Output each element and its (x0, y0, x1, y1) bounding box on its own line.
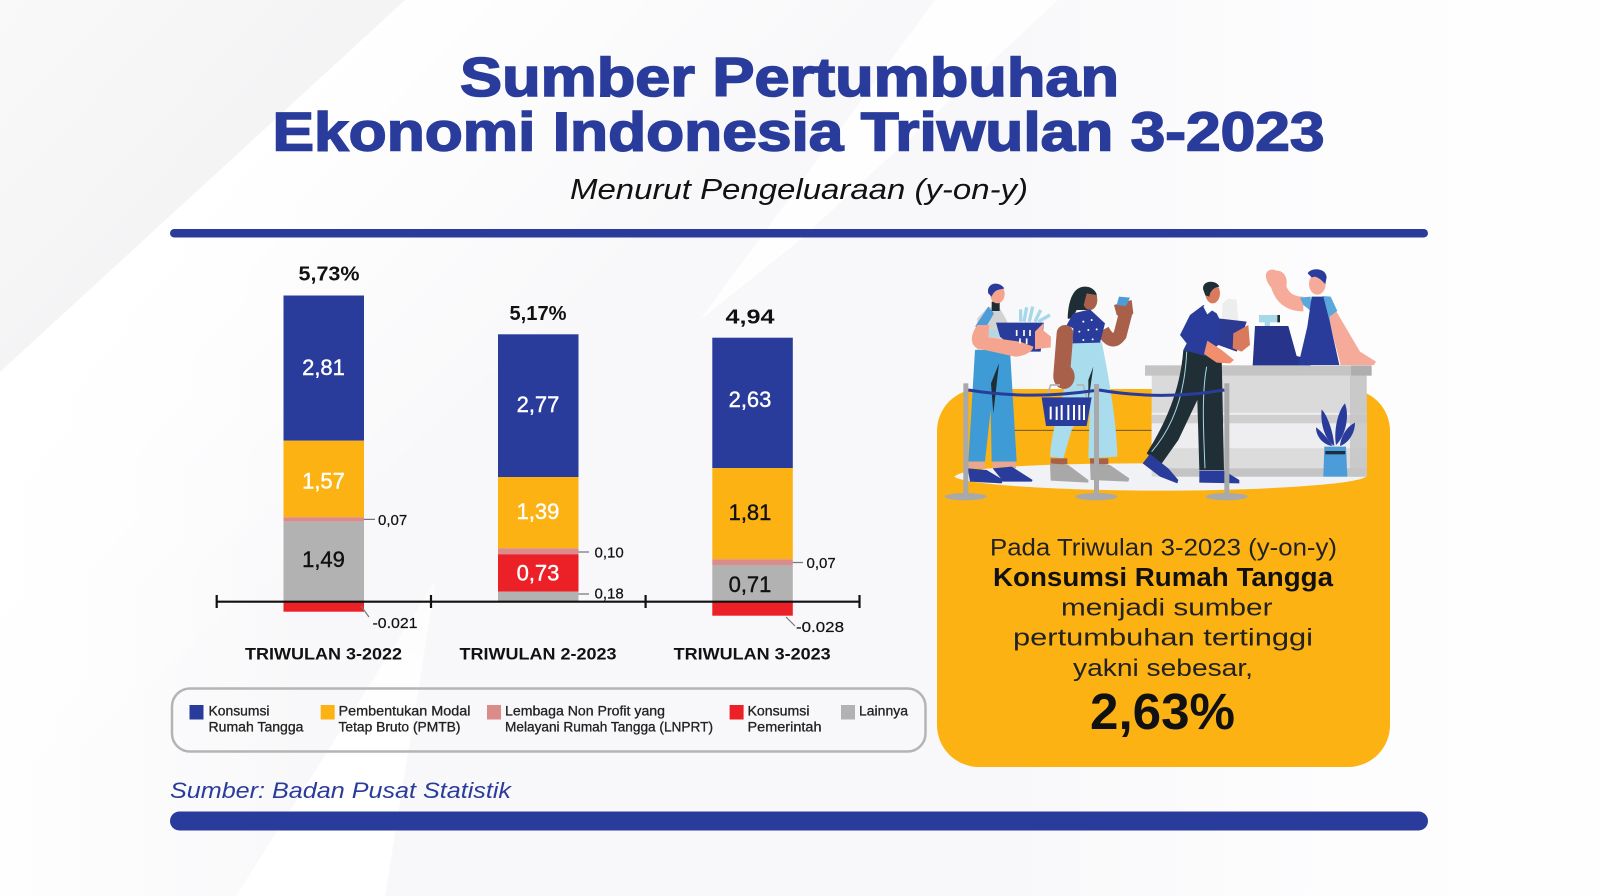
legend item: Konsumsi Rumah Tangga: Rumah Tangga (208, 720, 304, 734)
bar: Triwulan 2-2023: 1,39 (517, 499, 559, 524)
cashier (1266, 269, 1376, 365)
bar: Triwulan 3-2023: 0,71 (729, 572, 771, 597)
legend item: PMTB (321, 704, 470, 734)
title: Sumber Pertumbuhan (460, 46, 1119, 108)
bar: Triwulan 3-2023: 0,07 (806, 555, 836, 572)
legend item: Konsumsi Rumah Tangga (190, 704, 304, 734)
bar: Triwulan 3-2022: 5,73% (298, 264, 360, 286)
legend item: Konsumsi Pemerintah (730, 704, 822, 734)
bar: Triwulan 3-2023: -0.028 (796, 619, 844, 636)
bar: Triwulan 3-2022: 2,81 (302, 355, 345, 380)
rope barrier (945, 383, 1248, 500)
quarter labels: TRIWULAN 3-2023 (674, 644, 831, 664)
bar: Triwulan 3-2023: 4,94 (726, 306, 776, 328)
bar: Triwulan 2-2023: 2,77 (517, 392, 559, 417)
legend item: Lainnya: Lainnya (859, 704, 909, 718)
top rule (170, 229, 1428, 238)
finding text: menjadi sumber (1061, 594, 1272, 622)
legend item: Konsumsi Pemerintah: Pemerintah (748, 720, 822, 734)
legend item: LNPRT (487, 704, 713, 734)
bar: Triwulan 3-2022: 0,07 (378, 512, 407, 529)
quarter labels: TRIWULAN 2-2023 (460, 644, 616, 664)
quarter labels (245, 644, 831, 664)
bar: Triwulan 2-2023 (498, 303, 624, 602)
woman with phone (1050, 287, 1133, 483)
title: Ekonomi Indonesia Triwulan 3-2023 (272, 100, 1324, 162)
quarter labels: TRIWULAN 3-2022 (245, 644, 402, 664)
bar: Triwulan 3-2022: 1,57 (302, 468, 345, 494)
legend item: PMTB: Tetap Bruto (PMTB) (338, 720, 460, 734)
illustration: shoppers queueing at a cashier (945, 269, 1376, 500)
legend item: LNPRT: Lembaga Non Profit yang (505, 704, 665, 718)
bar: Triwulan 2-2023: 5,17% (510, 303, 567, 325)
bar: Triwulan 3-2022 (284, 264, 418, 632)
legend item: PMTB: Pembentukan Modal (338, 704, 470, 718)
man with basket (968, 284, 1051, 483)
bar: Triwulan 3-2022: 1,49 (302, 547, 345, 572)
finding text: Pada Triwulan 3-2023 (y-on-y) (990, 534, 1337, 562)
source: Sumber: Badan Pusat Statistik (170, 778, 513, 803)
axis (217, 595, 859, 608)
title (272, 46, 1324, 162)
finding text: 2,63% (1090, 683, 1235, 740)
shopping basket (1042, 385, 1092, 426)
legend item: Konsumsi Rumah Tangga: Konsumsi (208, 704, 270, 718)
bar: Triwulan 2-2023: 0,73 (517, 560, 559, 586)
bar: Triwulan 3-2023: 1,81 (729, 500, 771, 525)
bar: Triwulan 2-2023: 0,18 (594, 586, 624, 602)
stacked bar chart (217, 264, 859, 664)
legend item: LNPRT: Melayani Rumah Tangga (LNPRT) (505, 720, 713, 734)
cash register (1253, 315, 1311, 365)
man with shopping bag (1143, 282, 1250, 483)
legend item: Konsumsi Pemerintah: Konsumsi (748, 704, 810, 718)
finding text (990, 534, 1337, 740)
bar: Triwulan 3-2023: 2,63 (729, 387, 771, 412)
finding text: yakni sebesar, (1073, 655, 1253, 682)
bar: Triwulan 3-2022: -0.021 (372, 615, 418, 632)
panel: key finding card (937, 389, 1390, 767)
finding text: Konsumsi Rumah Tangga (993, 564, 1334, 592)
finding text: pertumbuhan tertinggi (1013, 624, 1313, 652)
bar: Triwulan 3-2023 (712, 306, 844, 636)
bar: Triwulan 2-2023: 0,10 (594, 544, 624, 562)
counter (1145, 365, 1372, 477)
legend (172, 688, 926, 752)
subtitle: Menurut Pengeluaraan (y-on-y) (570, 174, 1028, 206)
floor (954, 463, 1366, 491)
legend item: Lainnya (841, 704, 909, 720)
plant (1316, 403, 1355, 477)
bottom bar (170, 812, 1428, 830)
